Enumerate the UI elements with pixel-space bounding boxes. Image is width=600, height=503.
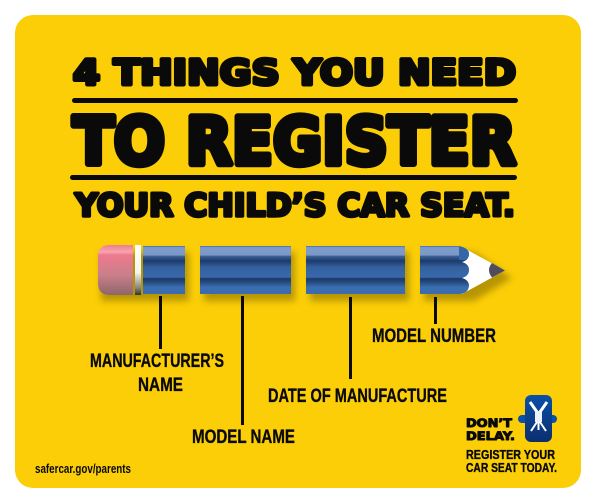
logo: don't delay	[466, 395, 557, 475]
title: your child's car seat: YOUR CHILD’S CAR SEAT.	[74, 188, 515, 224]
label: date of manufacture: DATE OF MANUFACTURE	[268, 386, 447, 407]
don't delay wordmark: DON’T	[466, 416, 512, 430]
rule: upper divider	[72, 98, 518, 103]
label: manufacturer's name: MANUFACTURER’S	[90, 351, 224, 372]
leader line: model name	[241, 296, 244, 425]
pencil segment 4	[420, 246, 469, 294]
website url: safercar.gov/parents	[35, 462, 131, 476]
rule: lower divider	[70, 175, 517, 180]
pencil segment 1	[143, 246, 185, 294]
lead	[489, 263, 505, 278]
ferrule	[135, 245, 141, 295]
pencil shadow	[101, 252, 512, 301]
pencil segment 3	[306, 246, 405, 294]
pencil segment 2	[200, 246, 291, 294]
label: model name: MODEL NAME	[192, 427, 295, 448]
eraser	[98, 245, 133, 295]
pencil tip	[420, 246, 505, 294]
title: 4 things you need: 4 THINGS YOU NEED	[73, 54, 516, 94]
pencil illustration	[98, 245, 512, 301]
leader line: manufacturer's name	[159, 296, 162, 349]
car seat today: CAR SEAT TODAY.	[466, 461, 557, 475]
register your: REGISTER YOUR	[466, 448, 555, 462]
leader line: date of manufacture	[349, 297, 352, 379]
delay word: DELAY.	[466, 429, 515, 443]
title: to register: TO REGISTER	[73, 105, 516, 180]
icon: car seat	[518, 395, 557, 442]
leader line: model number	[434, 297, 437, 324]
label: manufacturer's name line 2: NAME	[138, 375, 183, 396]
label: model number: MODEL NUMBER	[372, 326, 496, 347]
wood cone	[462, 247, 505, 294]
